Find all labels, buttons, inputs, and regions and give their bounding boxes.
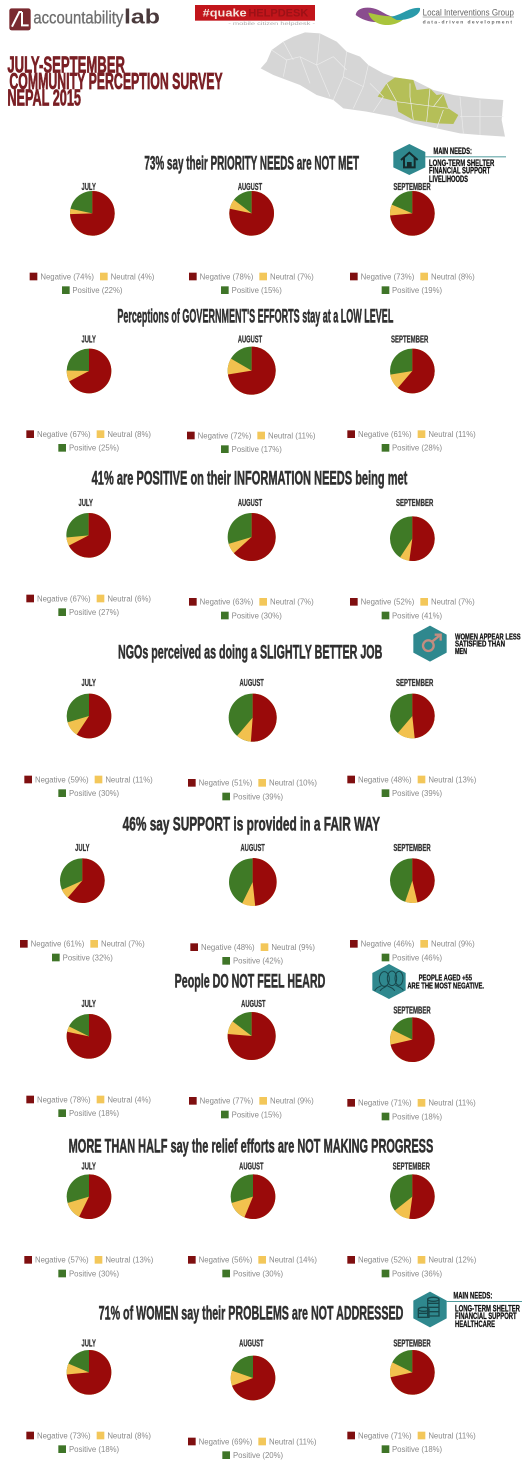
map of Nepal [261, 32, 505, 137]
legend: September [350, 598, 475, 620]
legend: July [30, 272, 155, 295]
legend: September: Positive (18%) [392, 1112, 443, 1121]
legend: July: Negative (67%) [37, 430, 91, 439]
legend: July: Positive (30%) [69, 789, 120, 798]
legend: August: Neutral (14%) [269, 1256, 317, 1265]
month labels: JULY [78, 498, 93, 509]
pie chart: September [390, 1017, 435, 1062]
icon: group of people [372, 964, 406, 999]
month labels: SEPTEMBER [393, 1339, 431, 1350]
legend: September: Positive (28%) [392, 444, 443, 453]
callout text: MEN [455, 646, 467, 656]
pie chart: July [60, 858, 105, 903]
pie chart: August [231, 1174, 275, 1219]
legend: July: Neutral (7%) [101, 940, 145, 949]
main needs text [447, 1291, 522, 1329]
section 6: not heard [26, 971, 476, 1121]
pie chart: September [390, 858, 435, 903]
legend: August [189, 1097, 314, 1119]
month labels: AUGUST [239, 1339, 263, 1350]
icon: house [393, 144, 425, 175]
legend: September: Neutral (11%) [428, 1099, 476, 1108]
legend: July: Neutral (6%) [107, 594, 151, 603]
pie chart: July [66, 513, 111, 558]
legend: September: Positive (46%) [392, 953, 443, 962]
callout text: SATISFIED THAN [455, 639, 505, 649]
legend: September: Neutral (7%) [431, 598, 475, 607]
legend: September: Neutral (11%) [428, 1431, 476, 1440]
legend: August [187, 431, 316, 454]
month labels: SEPTEMBER [396, 498, 433, 509]
month labels: JULY [81, 334, 96, 345]
month labels [81, 182, 431, 193]
header: logos, title and map [7, 5, 514, 137]
legend: August: Positive (39%) [233, 792, 284, 801]
legend: August [189, 272, 314, 295]
legend: July [20, 940, 145, 962]
legend: September: Positive (39%) [392, 789, 443, 798]
legend: July: Neutral (4%) [107, 1095, 151, 1104]
legend: September: Neutral (9%) [431, 940, 475, 949]
section 2: government efforts [26, 307, 476, 454]
legend: August [188, 1256, 317, 1278]
month labels [81, 678, 433, 689]
pie chart: July [67, 694, 111, 738]
pie chart: July [67, 1014, 111, 1059]
legend: July: Negative (73%) [37, 1431, 91, 1440]
legend: July: Positive (30%) [69, 1269, 120, 1278]
month labels: SEPTEMBER [393, 182, 431, 193]
month labels: SEPTEMBER [393, 1006, 431, 1017]
pie chart: September [390, 1350, 435, 1395]
logo: quake helpdesk: #quake [203, 8, 247, 20]
month labels: AUGUST [241, 999, 265, 1010]
legend: September: Negative (61%) [358, 430, 412, 439]
callout: people aged 55+ [372, 964, 484, 999]
legend: July: Positive (32%) [63, 953, 113, 962]
callout text [407, 972, 484, 991]
legend: August: Neutral (9%) [271, 943, 315, 952]
month labels [78, 498, 433, 509]
legend: August: Negative (48%) [201, 943, 255, 952]
legend: July: Positive (18%) [69, 1109, 120, 1118]
legend: August: Positive (15%) [232, 286, 282, 295]
month labels: SEPTEMBER [396, 678, 433, 689]
legend: July: Neutral (11%) [105, 775, 153, 784]
legend: August: Positive (17%) [232, 445, 282, 454]
legend: September: Positive (41%) [392, 611, 443, 620]
icon: gender symbol [413, 626, 447, 662]
legend: July [26, 1095, 151, 1118]
legend: August: Negative (51%) [199, 779, 253, 788]
legend: August: Neutral (7%) [270, 272, 314, 281]
legend: August [188, 1437, 317, 1460]
month labels: AUGUST [240, 843, 265, 854]
legend: July: Neutral (4%) [111, 272, 155, 281]
month labels [81, 1161, 430, 1172]
pie chart: July [67, 1174, 111, 1219]
legend: July [26, 594, 151, 617]
legend: September [350, 940, 475, 962]
section 5: fair support [20, 815, 475, 966]
legend: July [24, 775, 153, 798]
pie chart: July [70, 191, 115, 236]
month labels [81, 334, 428, 345]
icon: coin stacks [413, 1292, 447, 1327]
logo: Accountability Lab [9, 6, 160, 30]
main needs text: MAIN NEEDS: [433, 146, 472, 156]
month labels: JULY [81, 1161, 96, 1172]
legend: August: Neutral (7%) [270, 598, 314, 607]
pie chart: July [67, 1350, 111, 1395]
pie chart: September [390, 191, 435, 236]
pie chart: July [67, 349, 111, 393]
legend: July: Positive (27%) [69, 608, 120, 617]
callout: women less satisfied [413, 626, 521, 662]
legend: September: Negative (71%) [358, 1099, 412, 1108]
pie chart: August [229, 694, 277, 742]
month labels: SEPTEMBER [391, 334, 428, 345]
month labels: JULY [81, 1339, 96, 1350]
callout: main needs (shelter) [393, 144, 506, 184]
legend: September: Neutral (11%) [428, 430, 476, 439]
legend: August: Neutral (11%) [269, 1437, 317, 1446]
pie chart: September [390, 516, 435, 561]
legend: July: Neutral (8%) [107, 1431, 151, 1440]
legend: August: Negative (77%) [200, 1097, 254, 1106]
callout text: ARE THE MOST NEGATIVE. [407, 981, 484, 991]
main needs text: HEALTHCARE [455, 1319, 495, 1329]
legend: September: Positive (18%) [392, 1445, 443, 1454]
pie chart: September [390, 349, 435, 393]
legend: September: Negative (46%) [361, 940, 415, 949]
legend: July: Negative (61%) [31, 940, 85, 949]
legend: July [24, 1256, 154, 1278]
callout: main needs (healthcare) [413, 1291, 522, 1329]
logo: Local Interventions Group [356, 7, 514, 26]
legend: August: Neutral (10%) [269, 779, 317, 788]
section 1: priority needs [30, 153, 475, 295]
pie chart: September [390, 1174, 435, 1219]
legend: September [347, 1099, 476, 1121]
legend: September: Negative (71%) [358, 1431, 412, 1440]
pie chart: August [228, 347, 276, 395]
pie chart: September [390, 694, 435, 738]
legend: August: Positive (15%) [232, 1110, 282, 1119]
main needs text: MAIN NEEDS: [453, 1291, 492, 1301]
legend: August [190, 943, 315, 966]
month labels: AUGUST [238, 498, 262, 509]
logo: quake helpdesk: - mobile citizen helpdesk - [228, 21, 316, 26]
month labels: JULY [81, 999, 96, 1010]
legend: September: Negative (73%) [361, 272, 415, 281]
logo: Accountability Lab: lab [124, 6, 160, 28]
logo: Local Interventions Group: data-driven development [423, 20, 512, 26]
month labels: JULY [81, 678, 96, 689]
title: NEPAL 2015 [7, 84, 81, 110]
section 4: NGOs [24, 642, 477, 801]
legend: July: Neutral (8%) [107, 430, 151, 439]
legend: August: Negative (72%) [198, 431, 252, 440]
legend: August: Negative (69%) [199, 1437, 253, 1446]
month labels: AUGUST [239, 678, 264, 689]
month labels: AUGUST [239, 1161, 263, 1172]
legend: July: Positive (25%) [69, 444, 120, 453]
logo: quake helpdesk: HELPDESK [248, 8, 309, 20]
legend: August: Negative (56%) [199, 1256, 253, 1265]
logo: Local Interventions Group: Local Interventions Group [423, 7, 514, 17]
title: COMMUNITY PERCEPTION SURVEY [9, 68, 223, 94]
legend: July: Positive (18%) [69, 1445, 120, 1454]
legend: July [26, 430, 151, 453]
legend: September: Neutral (8%) [431, 272, 475, 281]
legend: August: Positive (42%) [233, 957, 284, 966]
main needs text [425, 146, 506, 184]
month labels: SEPTEMBER [393, 1161, 430, 1172]
pie chart: August [228, 513, 276, 561]
legend: August [188, 779, 317, 801]
legend: August: Positive (20%) [233, 1451, 284, 1460]
main needs text: FINANCIAL SUPPORT [429, 166, 491, 176]
legend: August [189, 598, 314, 620]
month labels: JULY [75, 843, 90, 854]
logo: quake helpdesk [195, 5, 316, 26]
month labels: AUGUST [238, 334, 262, 345]
legend: September: Negative (48%) [358, 775, 412, 784]
month labels: SEPTEMBER [393, 843, 431, 854]
legend: August: Negative (63%) [200, 598, 254, 607]
logo: Accountability Lab: accountability [33, 7, 124, 27]
title [7, 52, 223, 110]
legend: September: Positive (36%) [392, 1269, 443, 1278]
month labels [81, 1339, 431, 1350]
pie chart: August [229, 858, 276, 906]
legend: September: Negative (52%) [361, 598, 415, 607]
callout text: PEOPLE AGED +55 [419, 972, 472, 982]
month labels: AUGUST [238, 182, 262, 193]
legend: August: Positive (30%) [232, 611, 282, 620]
legend: September: Neutral (12%) [428, 1256, 477, 1265]
month labels [75, 843, 431, 854]
legend: August: Neutral (9%) [270, 1097, 314, 1106]
legend: July: Negative (59%) [35, 775, 89, 784]
legend: August: Neutral (11%) [268, 431, 316, 440]
legend: July: Negative (78%) [37, 1095, 91, 1104]
legend: August: Negative (78%) [200, 272, 254, 281]
legend: September [347, 1256, 477, 1278]
pie chart: August [228, 1012, 276, 1060]
section 8: women's problems [26, 1304, 476, 1460]
legend: July: Negative (67%) [37, 594, 91, 603]
legend: July: Neutral (13%) [105, 1256, 154, 1265]
legend: September: Neutral (13%) [428, 775, 477, 784]
legend: July: Negative (74%) [40, 272, 94, 281]
section 7: relief progress [24, 1136, 477, 1278]
main needs text: LIVELIHOODS [429, 174, 468, 184]
legend: July: Positive (22%) [72, 286, 123, 295]
callout text [455, 631, 521, 656]
legend: August: Positive (30%) [233, 1269, 284, 1278]
legend: September [347, 1431, 476, 1454]
pie chart: August [231, 1356, 275, 1400]
month labels: JULY [81, 182, 96, 193]
legend: July [26, 1431, 151, 1454]
month labels [81, 999, 431, 1017]
legend: September [347, 775, 477, 798]
heading: People DO NOT FEEL HEARD [175, 971, 325, 992]
title: JULY-SEPTEMBER [7, 52, 125, 78]
legend: September: Negative (52%) [358, 1256, 412, 1265]
legend: July: Negative (57%) [35, 1256, 89, 1265]
pie chart: August [229, 191, 274, 236]
legend: September [347, 430, 476, 453]
legend: September [350, 272, 475, 295]
legend: September: Positive (19%) [392, 286, 443, 295]
section 3: information needs [26, 468, 475, 620]
